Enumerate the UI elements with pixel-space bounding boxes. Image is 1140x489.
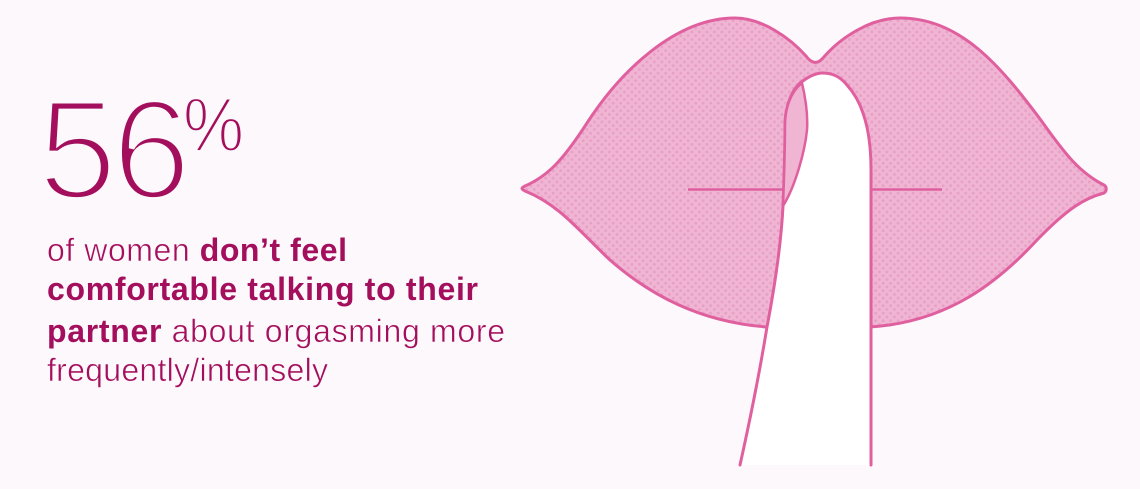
description text: partner about orgasming more xyxy=(47,313,505,349)
statistic: 56% xyxy=(38,70,244,230)
statistic: 56%: 6 xyxy=(112,70,191,230)
statistic: 56%: % xyxy=(183,83,244,168)
lips xyxy=(522,18,1106,327)
description text: comfortable talking to their xyxy=(47,271,478,307)
fingernail xyxy=(783,83,807,206)
statistic: 56%: 5 xyxy=(38,70,117,230)
description text: frequently/intensely xyxy=(47,352,328,388)
finger xyxy=(740,73,871,465)
description text: of women don’t feel xyxy=(47,232,347,268)
illustration: lips with finger xyxy=(522,18,1106,465)
mouth line left xyxy=(688,188,784,191)
mouth line right xyxy=(871,188,942,191)
description text xyxy=(47,232,505,388)
